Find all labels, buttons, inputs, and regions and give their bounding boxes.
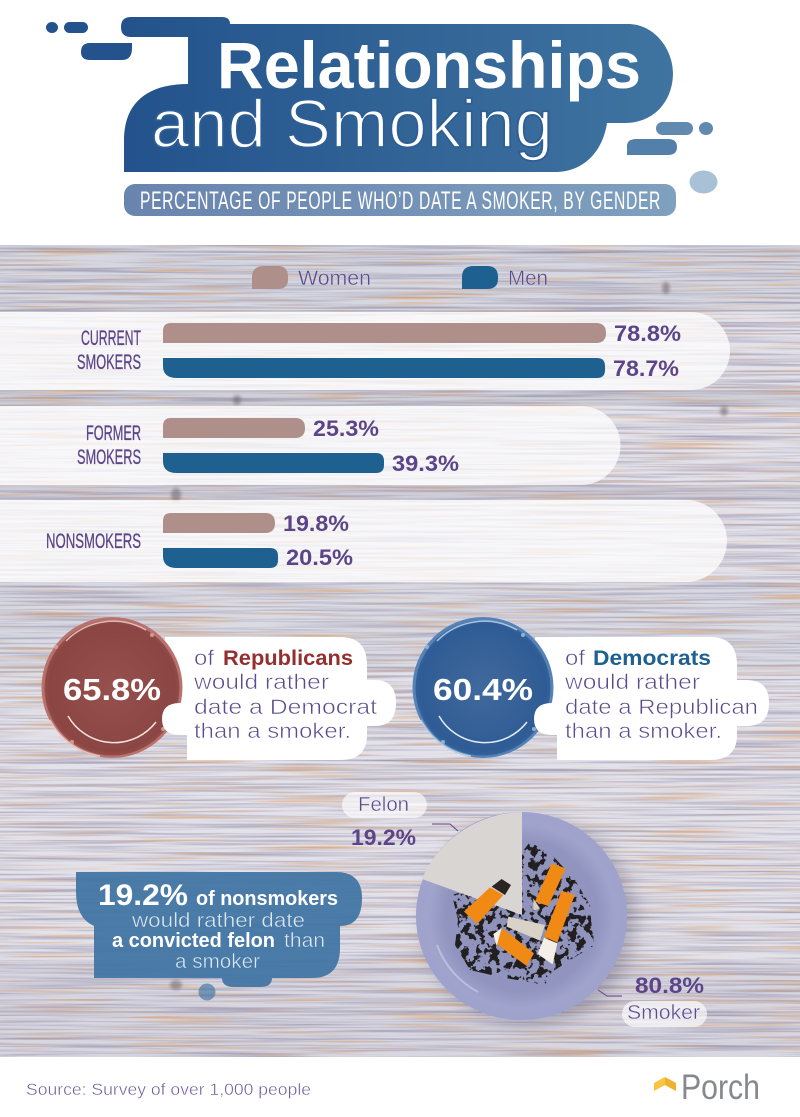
label: smoker: Smoker bbox=[627, 1002, 700, 1024]
label: nonsmokers: NONSMOKERS bbox=[46, 530, 141, 553]
label: felon: Felon bbox=[358, 794, 409, 816]
leader line: smoker bbox=[598, 990, 622, 996]
panel: current smokers bbox=[0, 312, 730, 390]
legend: Men bbox=[508, 267, 548, 290]
text: felon statistic: would rather date bbox=[131, 910, 305, 932]
label: current smokers: CURRENT bbox=[81, 327, 141, 350]
bar: men 20.5% bbox=[163, 548, 278, 568]
title bbox=[151, 28, 641, 162]
label: felon bbox=[342, 792, 427, 818]
text: felon statistic bbox=[98, 879, 338, 973]
source: Source: Survey of over 1,000 people bbox=[26, 1080, 311, 1099]
pie slice: smoker 80.8% bbox=[416, 812, 627, 1020]
bar: men 39.3% bbox=[163, 453, 384, 473]
value: smoker 80.8%: 80.8% bbox=[635, 973, 704, 998]
text: republicans: of bbox=[194, 647, 214, 670]
text: democrats: date a Republican bbox=[565, 696, 758, 719]
value: 60.4%: 60.4% bbox=[433, 672, 533, 707]
callout bubble: felon statistic bbox=[76, 872, 362, 987]
callout lobe: democrats bbox=[534, 703, 572, 735]
value: men 39.3%: 39.3% bbox=[392, 451, 459, 476]
panel: former smokers bbox=[0, 406, 620, 485]
logo: porch: Porch bbox=[681, 1068, 760, 1107]
callout: democrats bbox=[412, 617, 769, 760]
callout bubble: republicans bbox=[165, 637, 396, 760]
bar: women 78.8% bbox=[163, 323, 606, 343]
bar: women 19.8% bbox=[163, 513, 275, 533]
label: former smokers bbox=[77, 422, 141, 469]
text: republicans: than a smoker. bbox=[194, 720, 351, 743]
value: women 25.3%: 25.3% bbox=[313, 416, 379, 441]
bar: men 78.7% bbox=[163, 358, 605, 378]
label: smoker bbox=[622, 1001, 707, 1027]
text: republicans: Republicans bbox=[223, 647, 353, 670]
text: democrats: Democrats bbox=[593, 647, 711, 670]
value: women 78.8%: 78.8% bbox=[614, 321, 681, 346]
icon: blue ashtray bbox=[412, 617, 554, 758]
text: democrats bbox=[564, 647, 758, 743]
bar: women 25.3% bbox=[163, 418, 305, 438]
pie slice: felon 19.2% bbox=[422, 812, 522, 915]
text: republicans: would rather bbox=[193, 671, 329, 694]
cigarette butts bbox=[464, 863, 575, 966]
label: former smokers: FORMER bbox=[86, 422, 141, 445]
text: republicans: date a Democrat bbox=[194, 696, 377, 719]
value: women 19.8%: 19.8% bbox=[283, 511, 349, 536]
callout: felon statistic bbox=[76, 872, 362, 1000]
text: democrats: than a smoker. bbox=[565, 720, 722, 743]
text: democrats: would rather bbox=[564, 671, 700, 694]
label: current smokers bbox=[77, 327, 141, 374]
callout: republicans bbox=[42, 617, 396, 760]
header decoration: right pills bbox=[627, 122, 718, 194]
title: and Smoking bbox=[151, 86, 553, 162]
leader line: felon bbox=[432, 824, 458, 831]
callout bubble: democrats bbox=[535, 637, 769, 760]
text: democrats: of bbox=[565, 647, 585, 670]
wood background bbox=[0, 245, 800, 1057]
header decoration: left pills bbox=[46, 22, 132, 60]
text: felon statistic: 19.2% bbox=[98, 879, 188, 912]
panel: nonsmokers bbox=[0, 500, 727, 582]
ash bbox=[452, 842, 595, 985]
legend: Women bbox=[298, 267, 371, 290]
title: Relationships bbox=[217, 28, 641, 102]
text: felon statistic: a convicted felon bbox=[112, 930, 275, 952]
header shape bbox=[121, 17, 673, 172]
value: men 20.5%: 20.5% bbox=[286, 545, 353, 570]
chart: ashtray pie chart bbox=[416, 812, 636, 1026]
label: former smokers: SMOKERS bbox=[77, 446, 141, 469]
value: 65.8%: 65.8% bbox=[63, 672, 161, 707]
icon: red ashtray bbox=[42, 617, 182, 758]
text: felon statistic: of nonsmokers bbox=[196, 888, 338, 910]
legend bbox=[252, 266, 548, 290]
text: republicans bbox=[193, 647, 377, 743]
callout lobe: republicans bbox=[162, 703, 200, 735]
logo: porch bbox=[654, 1068, 760, 1107]
label: current smokers: SMOKERS bbox=[77, 351, 141, 374]
value: felon 19.2%: 19.2% bbox=[351, 825, 416, 850]
decorative dot bbox=[198, 984, 216, 1000]
text: felon statistic: than bbox=[284, 930, 325, 952]
value: men 78.7%: 78.7% bbox=[613, 356, 679, 381]
text: felon statistic: a smoker bbox=[175, 951, 260, 973]
